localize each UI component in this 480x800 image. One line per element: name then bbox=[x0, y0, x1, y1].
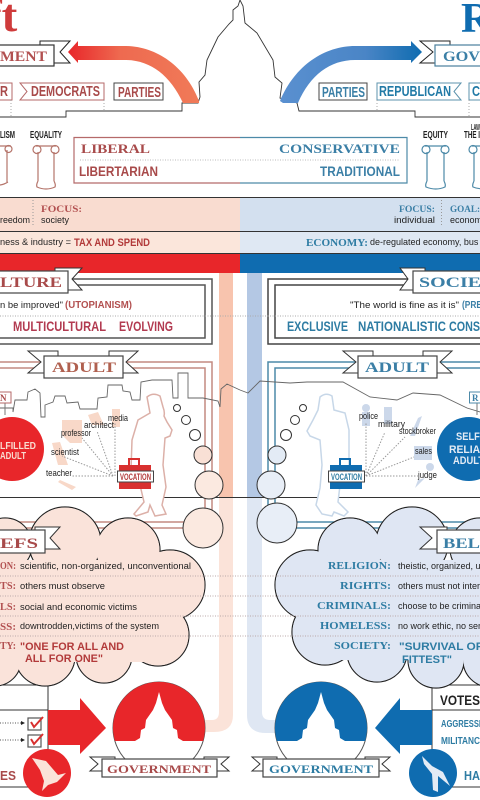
occupation labels: sales bbox=[415, 446, 432, 456]
ribbon: beliefs right bbox=[420, 527, 480, 553]
icon: checkboxes bbox=[28, 717, 43, 747]
panel: focus and economy bands: ECONOMY: bbox=[306, 238, 368, 249]
frame: adult right bbox=[268, 362, 480, 528]
pale occupation icons bbox=[52, 409, 120, 490]
self-reliant adult circle bbox=[437, 417, 480, 481]
pillars left: LISM bbox=[0, 130, 15, 141]
person silhouette bbox=[131, 394, 172, 516]
pillar: equity bbox=[422, 146, 449, 189]
beliefs text left: others must observe bbox=[20, 581, 105, 591]
beliefs text right: RIGHTS: bbox=[340, 581, 391, 592]
pillars right bbox=[422, 123, 480, 189]
party labels right: REPUBLICAN bbox=[379, 83, 451, 100]
occupation labels: military bbox=[378, 419, 405, 429]
party labels left bbox=[0, 83, 163, 116]
ribbon: government right bbox=[420, 41, 480, 66]
seal: right capitol bbox=[275, 682, 367, 774]
adult scene right bbox=[307, 392, 480, 516]
occupation labels: police bbox=[359, 411, 378, 421]
frame: adult left bbox=[0, 362, 212, 528]
panel: votes left bbox=[0, 685, 48, 787]
ribbon: beliefs left bbox=[0, 527, 60, 553]
panel: focus and economy bands: FOCUS: bbox=[399, 204, 435, 214]
beliefs text right: SOCIETY: bbox=[334, 641, 391, 652]
pale occupation icons bbox=[362, 404, 434, 488]
panel: focus and economy bands: FOCUS: bbox=[41, 204, 82, 214]
occupation labels: judge bbox=[417, 470, 437, 480]
pillars right: EQUITY bbox=[423, 130, 448, 141]
ribbon: government left seal: GOVERNMENT bbox=[107, 762, 211, 776]
panel: culture left: n be improved" bbox=[0, 300, 63, 310]
pillar: partial bbox=[469, 146, 480, 189]
panel: liberal conservative box: CONSERVATIVE bbox=[279, 142, 400, 156]
ribbon: culture bbox=[0, 268, 82, 293]
party labels right: PARTIES bbox=[322, 84, 365, 101]
ribbon: government right seal: GOVERNMENT bbox=[269, 762, 373, 776]
panel: votes right bbox=[432, 685, 480, 787]
seal: left capitol bbox=[113, 682, 205, 774]
thought bubbles left bbox=[174, 404, 223, 548]
icon: vocation briefcase bbox=[118, 459, 154, 489]
panel: liberal conservative box: LIBERAL bbox=[81, 142, 150, 156]
ribbon: culture: LTURE bbox=[0, 275, 62, 291]
party labels left: DEMOCRATS bbox=[31, 83, 100, 100]
occupation labels bbox=[46, 413, 128, 478]
icon: vocation briefcase: VOCATION bbox=[331, 472, 362, 482]
panel: focus and economy bands: GOAL: bbox=[450, 204, 480, 214]
panel: society right bbox=[268, 268, 480, 344]
skyline left bbox=[0, 373, 240, 417]
tag: R bbox=[472, 393, 479, 403]
beliefs text left: SS: bbox=[0, 622, 16, 633]
beliefs text left: ALL FOR ONE" bbox=[25, 653, 103, 665]
occupation labels bbox=[359, 411, 437, 480]
capitol outline bbox=[0, 0, 480, 117]
pillar: partial bbox=[0, 146, 12, 185]
beliefs text right: HOMELESS: bbox=[320, 621, 391, 632]
panel: votes left: ES bbox=[0, 768, 16, 783]
pillars left bbox=[0, 130, 62, 189]
party labels left: PARTIES bbox=[118, 84, 161, 101]
party labels right bbox=[319, 83, 480, 116]
arrow: red to government seal bbox=[48, 698, 106, 754]
panel: culture left: MULTICULTURAL bbox=[13, 318, 106, 334]
occupation labels: teacher bbox=[46, 468, 72, 478]
beliefs text left: social and economic victims bbox=[20, 602, 138, 612]
panel: focus and economy bands: society bbox=[41, 215, 69, 225]
dotted belief rows bbox=[0, 576, 480, 636]
panel: society right: NATIONALISTIC bbox=[358, 318, 446, 334]
panel: culture left: (UTOPIANISM) bbox=[65, 300, 132, 311]
ribbon: adult right: ADULT bbox=[365, 360, 429, 376]
tag: N bbox=[0, 393, 7, 403]
panel: focus and economy bands: de-regulated economy, bus bbox=[370, 237, 479, 247]
icon: vocation briefcase bbox=[328, 459, 364, 489]
ribbon: government left bbox=[0, 41, 70, 66]
beliefs text left: ON: bbox=[0, 561, 16, 572]
occupation labels: professor bbox=[61, 428, 91, 438]
fulfilled adult circle: ADULT bbox=[0, 450, 26, 462]
panel: liberal conservative box: TRADITIONAL bbox=[320, 163, 400, 179]
panel: society right: "The world is fine as it is" bbox=[350, 300, 459, 310]
pillar: equality bbox=[33, 146, 59, 189]
beliefs text left: scientific, non-organized, unconventional bbox=[20, 561, 191, 571]
party labels left: R bbox=[0, 83, 8, 100]
tag bbox=[0, 392, 11, 415]
ribbon: society: SOCIE bbox=[419, 275, 480, 291]
arrow: right to government bbox=[280, 41, 422, 103]
ribbon: beliefs right: BEL bbox=[443, 536, 480, 552]
icon: dove bbox=[23, 749, 71, 797]
ribbon: government left: MENT bbox=[0, 49, 47, 65]
occupation labels: media bbox=[108, 413, 128, 423]
panel: liberal conservative box bbox=[74, 138, 407, 183]
beliefs text right bbox=[317, 561, 480, 666]
icon: vocation briefcase: VOCATION bbox=[120, 472, 151, 482]
beliefs text left: downtrodden,victims of the system bbox=[20, 621, 159, 631]
beliefs text left bbox=[0, 561, 191, 665]
fulfilled adult circle bbox=[0, 417, 44, 481]
panel: liberal conservative box: LIBERTARIAN bbox=[79, 163, 158, 179]
panel: focus and economy bands bbox=[0, 197, 480, 253]
beliefs text left: LS: bbox=[0, 602, 16, 613]
beliefs text left: TS: bbox=[0, 581, 16, 592]
tall vertical bands bbox=[205, 273, 280, 733]
panel: focus and economy bands: ness & industry = bbox=[0, 237, 71, 247]
fulfilled adult circle: LFILLED bbox=[0, 440, 36, 452]
dotted rays bbox=[366, 422, 418, 476]
colour strip bbox=[0, 253, 480, 273]
arrow: left to government bbox=[68, 41, 199, 103]
beliefs text right: CRIMINALS: bbox=[317, 601, 391, 612]
occupation labels: architect bbox=[84, 420, 114, 430]
ground line bbox=[0, 496, 480, 498]
panel: focus and economy bands: reedom bbox=[0, 215, 30, 225]
ribbon: adult right bbox=[343, 351, 452, 378]
hills right bbox=[240, 381, 480, 412]
ribbon: government right seal bbox=[252, 757, 390, 777]
cloud right bbox=[275, 507, 480, 688]
pillars left: EQUALITY bbox=[30, 130, 62, 141]
arrow: blue to government seal bbox=[375, 698, 432, 754]
person silhouette bbox=[307, 394, 349, 516]
ribbon: government left seal bbox=[90, 757, 229, 777]
occupation labels: scientist bbox=[51, 447, 79, 457]
icon: hawk bbox=[409, 749, 457, 797]
ribbon: beliefs left: EFS bbox=[0, 536, 38, 552]
ribbon: adult left bbox=[28, 351, 138, 378]
divider dotted bbox=[0, 315, 480, 317]
panel: focus and economy bands: individual bbox=[394, 215, 435, 225]
dotted rays bbox=[62, 422, 115, 476]
beliefs text right: RELIGION: bbox=[328, 561, 391, 572]
panel: culture left: EVOLVING bbox=[119, 318, 173, 334]
tag bbox=[470, 392, 480, 415]
occupation labels: stockbroker bbox=[399, 426, 436, 436]
thought bubbles right bbox=[257, 404, 306, 543]
beliefs text right: FITTEST" bbox=[402, 654, 452, 666]
beliefs text left: TY: bbox=[0, 641, 16, 652]
ribbon: adult left: ADULT bbox=[52, 360, 116, 376]
cloud left bbox=[0, 507, 205, 686]
adult scene left bbox=[0, 392, 172, 516]
ribbon: society bbox=[400, 268, 480, 293]
beliefs text left: "ONE FOR ALL AND bbox=[20, 641, 124, 653]
panel: society right: EXCLUSIVE bbox=[287, 318, 348, 334]
ribbon: government right: GOV bbox=[443, 49, 480, 65]
beliefs text right: "SURVIVAL OF bbox=[399, 641, 480, 653]
panel: focus and economy bands: TAX AND SPEND bbox=[74, 237, 150, 249]
panel: culture left bbox=[0, 268, 212, 344]
